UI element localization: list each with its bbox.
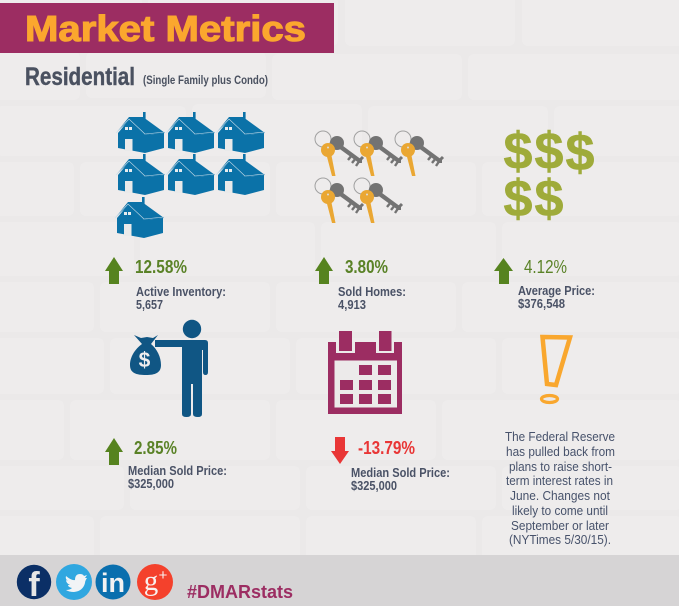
title text: Market Metrics	[25, 8, 306, 49]
metric: median sold price down: Median Sold Price:	[351, 465, 450, 480]
metric: median sold price up: Median Sold Price:	[128, 463, 227, 478]
metric: median sold price down	[331, 437, 450, 493]
heading: Residential: Residential	[25, 63, 135, 91]
icon group: keys	[315, 131, 443, 223]
icon: calendar	[328, 331, 402, 414]
metric: average price	[494, 257, 595, 311]
text block: Federal Reserve note: (NYTimes 5/30/15).	[509, 532, 611, 547]
icon group: houses	[115, 112, 265, 238]
icon: exclamation mark	[542, 337, 570, 402]
heading: Residential	[25, 63, 268, 91]
metric: average price: Average Price:	[518, 283, 595, 298]
icon group: dollar signs: $	[535, 122, 564, 180]
icon group: dollar signs: $	[566, 124, 595, 182]
text block: Federal Reserve note: likely to come until	[512, 503, 608, 518]
metric: average price: $376,548	[518, 296, 565, 311]
text block: Federal Reserve note: The Federal Reserve	[505, 429, 615, 444]
text block: Federal Reserve note: term interest rates in	[506, 473, 613, 488]
metric: median sold price up	[105, 438, 227, 491]
icon: facebook: f	[28, 566, 40, 604]
metric: sold homes: Sold Homes:	[338, 284, 406, 299]
icon group: dollar signs: $	[504, 122, 533, 180]
metric: median sold price down: $325,000	[351, 478, 397, 493]
footer bar	[0, 555, 679, 606]
text block: Federal Reserve note: June. Changes not	[510, 488, 610, 503]
metric: active inventory: 5,657	[136, 297, 163, 312]
metric: sold homes: 3.80%	[345, 257, 388, 277]
icon group: dollar signs: $	[535, 170, 564, 228]
metric: median sold price up: 2.85%	[134, 438, 177, 458]
metric: sold homes	[315, 257, 406, 312]
icon: person holding money bag: $	[139, 349, 151, 372]
metric: average price: 4.12%	[524, 257, 567, 277]
title banner	[0, 3, 334, 53]
text block: Federal Reserve note: September or later	[511, 518, 610, 533]
icon: google plus	[137, 564, 173, 600]
metric: median sold price up: $325,000	[128, 476, 174, 491]
metric: sold homes: 4,913	[338, 297, 366, 312]
icon: facebook	[17, 565, 51, 604]
text block: Federal Reserve note	[505, 429, 615, 547]
icon: linkedin	[96, 564, 130, 600]
icon: twitter	[56, 564, 92, 600]
text block: Federal Reserve note: has pulled back from	[506, 444, 615, 459]
metric: median sold price down: -13.79%	[358, 438, 415, 458]
icon: google plus: +	[159, 567, 168, 584]
icon group: dollar signs	[504, 122, 595, 228]
icon: linkedin: in	[101, 568, 125, 598]
metric: active inventory	[105, 257, 226, 312]
metric: active inventory: Active Inventory:	[136, 284, 226, 299]
icon: google plus: g	[144, 565, 158, 597]
icon group: dollar signs: $	[504, 170, 533, 228]
icon: person holding money bag	[130, 320, 208, 417]
hashtag: #DMARstats	[187, 582, 293, 602]
text block: Federal Reserve note: plans to raise short-	[509, 459, 612, 474]
heading: Residential: (Single Family plus Condo)	[143, 73, 268, 87]
metric: active inventory: 12.58%	[135, 257, 187, 277]
